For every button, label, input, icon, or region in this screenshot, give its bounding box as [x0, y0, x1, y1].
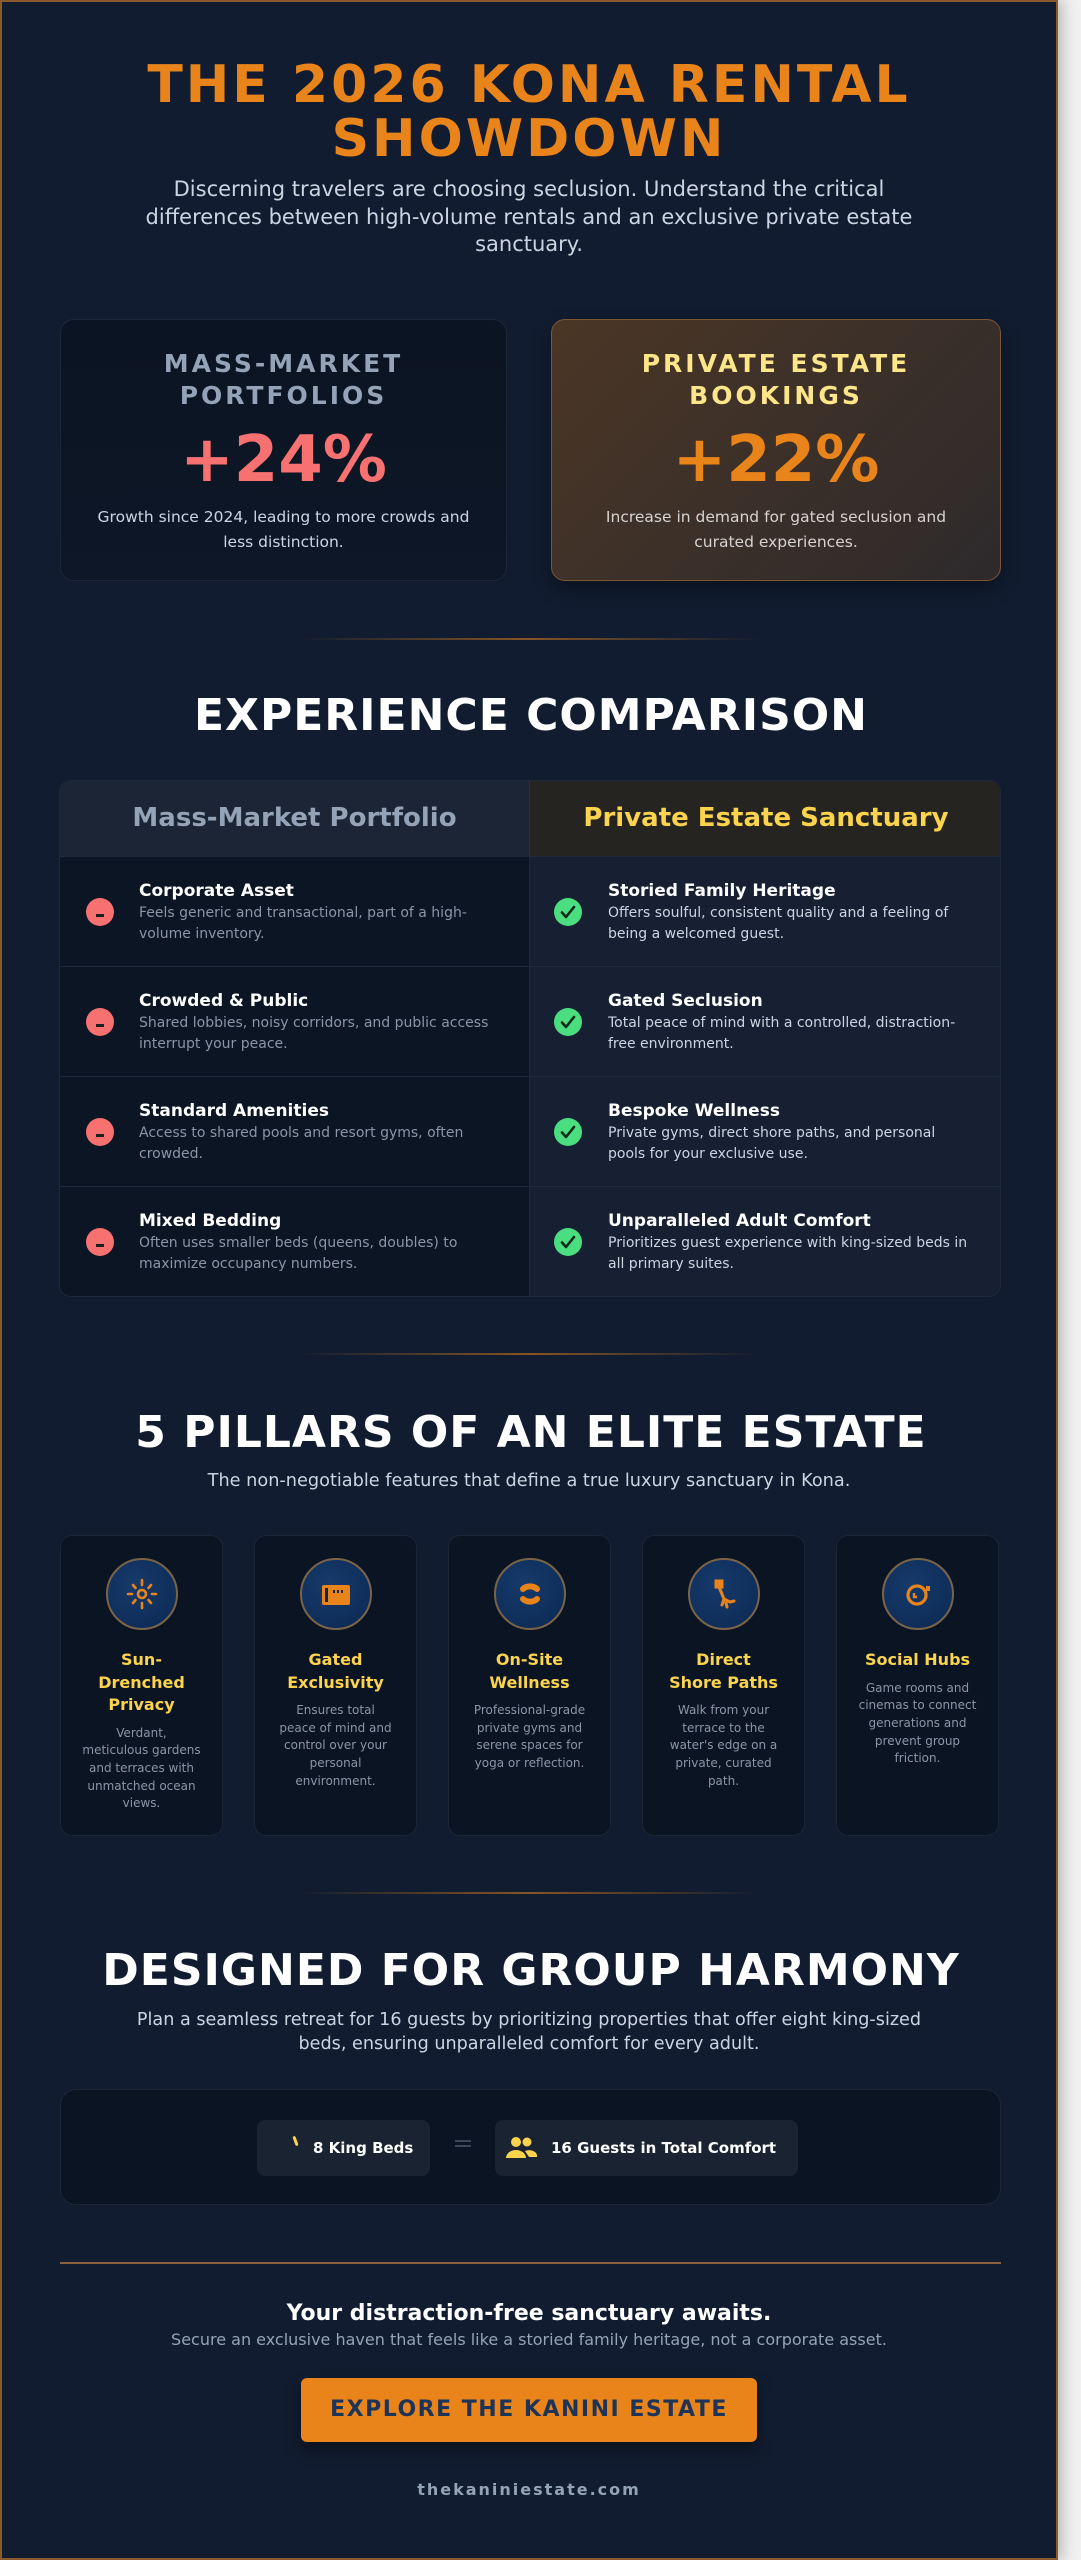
row 4 right	[529, 1186, 1002, 1296]
icon: path	[688, 1558, 760, 1630]
group harmony subtitle: beds, ensuring unparalleled comfort for every adult.	[298, 2034, 760, 2054]
pillar: on-site wellness: Professional-grade	[474, 1703, 585, 1717]
pill: guests: 16 Guests in Total Comfort	[551, 2139, 776, 2157]
pillar: direct shore paths: water's edge on a	[670, 1738, 777, 1752]
row 2 left: interrupt your peace.	[139, 1036, 288, 1052]
icon: check	[554, 898, 582, 926]
stat card: mass-market	[60, 319, 507, 581]
group harmony subtitle	[137, 2010, 921, 2054]
row 3 left: Standard Amenities	[139, 1101, 329, 1121]
subtitle: sanctuary.	[475, 232, 583, 256]
stat description: Increase in demand for gated seclusion and	[606, 508, 946, 526]
pillar: gated exclusivity: Exclusivity	[287, 1672, 384, 1692]
row 1 left: Corporate Asset	[139, 881, 294, 901]
pillar: gated exclusivity: Gated	[309, 1650, 362, 1669]
row 2 right	[529, 966, 1002, 1076]
icon: minus	[86, 1118, 114, 1146]
header: private estate	[529, 781, 1002, 856]
pillar: on-site wellness: serene spaces for	[476, 1738, 583, 1752]
stat value: +22%	[673, 423, 879, 497]
stat description	[98, 508, 469, 551]
row 4 left	[60, 1186, 529, 1296]
row 4 right: all primary suites.	[608, 1256, 734, 1272]
stat label: PORTFOLIOS	[180, 381, 387, 410]
stat card: private estate	[551, 319, 1001, 581]
stat label	[642, 349, 910, 410]
stat label: BOOKINGS	[689, 381, 863, 410]
heading: 5 pillars: 5 PILLARS OF AN ELITE ESTATE	[135, 1407, 927, 1458]
icon: check	[554, 1118, 582, 1146]
cta button	[301, 2378, 757, 2442]
stat value: +24%	[180, 423, 387, 497]
icon: check	[554, 1008, 582, 1036]
pillar: social hubs: Game rooms and	[866, 1680, 969, 1694]
stat description	[606, 508, 946, 551]
title	[147, 55, 911, 169]
icon: bed	[292, 2136, 299, 2146]
pillar: on-site wellness	[448, 1535, 611, 1836]
row 4 left: Mixed Bedding	[139, 1211, 281, 1231]
footer url: thekaniniestate.com	[417, 2480, 641, 2499]
row 1 left: Feels generic and transactional, part of a high-	[139, 905, 467, 921]
pillar: social hubs: friction.	[895, 1751, 940, 1765]
row 1 right	[529, 856, 1002, 966]
divider line	[60, 2262, 1001, 2264]
row 3 right: Bespoke Wellness	[608, 1101, 780, 1121]
stat label	[164, 349, 403, 410]
row 1 right: Storied Family Heritage	[608, 881, 836, 901]
heading: group harmony: DESIGNED FOR GROUP HARMONY	[102, 1945, 960, 1996]
heading: experience comparison: EXPERIENCE COMPARISON	[194, 690, 868, 741]
pillar: gated exclusivity: personal	[310, 1756, 361, 1770]
row 2 left: Crowded & Public	[139, 991, 308, 1011]
stat description: less distinction.	[223, 533, 344, 551]
pill: king beds	[257, 2120, 430, 2176]
row 2 right: Gated Seclusion	[608, 991, 763, 1011]
subtitle: Discerning travelers are choosing seclusion. Understand the critical	[174, 177, 884, 201]
pillar: sun-drenched privacy: Verdant,	[116, 1726, 167, 1740]
pillar: social hubs	[836, 1535, 999, 1836]
row 3 right	[529, 1076, 1002, 1186]
pillar: on-site wellness: private gyms and	[477, 1721, 582, 1735]
icon: social	[882, 1558, 954, 1630]
icon: people	[506, 2137, 537, 2158]
icon: minus	[86, 1008, 114, 1036]
stat description: curated experiences.	[694, 533, 858, 551]
stat label: PRIVATE ESTATE	[642, 349, 910, 378]
icon: sun	[106, 1558, 178, 1630]
pillar: direct shore paths: Shore Paths	[669, 1672, 778, 1692]
pillar: sun-drenched privacy: meticulous gardens	[82, 1743, 201, 1757]
pillar: gated exclusivity: environment.	[295, 1774, 376, 1788]
pillar: direct shore paths: path.	[708, 1774, 739, 1788]
cta heading: Your distraction-free sanctuary awaits.	[287, 2301, 771, 2326]
pillar: social hubs: generations and	[869, 1716, 966, 1730]
title: THE 2026 KONA RENTAL	[147, 55, 911, 115]
row 2 right: free environment.	[608, 1036, 734, 1052]
cta button: EXPLORE THE KANINI ESTATE	[330, 2397, 728, 2422]
icon: check	[554, 1228, 582, 1256]
pillar: direct shore paths: private, curated	[675, 1756, 772, 1770]
pillar: direct shore paths: Walk from your	[678, 1703, 769, 1717]
comparison table	[59, 780, 1001, 1297]
icon: wellness arcs	[494, 1558, 566, 1630]
group harmony subtitle: Plan a seamless retreat for 16 guests by prioritizing properties that offer eight king-sized	[137, 2010, 921, 2030]
row 2 left	[60, 966, 529, 1076]
row 1 left	[60, 856, 529, 966]
title: SHOWDOWN	[332, 109, 726, 169]
row 2 right: Total peace of mind with a controlled, distraction-	[608, 1015, 955, 1031]
pillar: sun-drenched privacy: and terraces with	[89, 1761, 194, 1775]
pillar: on-site wellness: On-Site	[496, 1650, 563, 1669]
pillar: direct shore paths: terrace to the	[682, 1721, 765, 1735]
row 2 left: Shared lobbies, noisy corridors, and public access	[139, 1015, 488, 1031]
pillar: direct shore paths	[642, 1535, 805, 1836]
pillar: social hubs: cinemas to connect	[859, 1698, 976, 1712]
row 1 right: being a welcomed guest.	[608, 926, 784, 942]
icon: keycard	[300, 1558, 372, 1630]
row 3 left: Access to shared pools and resort gyms, often	[139, 1125, 463, 1141]
pillar: sun-drenched privacy	[60, 1535, 223, 1836]
pill: king beds: 8 King Beds	[313, 2139, 413, 2157]
cta subtext: Secure an exclusive haven that feels like a storied family heritage, not a corporate asset.	[171, 2330, 887, 2349]
pillar: social hubs: Social Hubs	[865, 1650, 970, 1669]
icon: minus	[86, 1228, 114, 1256]
pillar: sun-drenched privacy: Privacy	[108, 1695, 175, 1714]
pillar: social hubs: prevent group	[875, 1734, 960, 1748]
subtitle	[146, 177, 912, 256]
header: mass-market: Mass-Market Portfolio	[132, 803, 457, 833]
header: mass-market	[60, 781, 529, 856]
pillar: gated exclusivity: peace of mind and	[279, 1721, 392, 1735]
row 3 left: crowded.	[139, 1146, 203, 1162]
pillar: sun-drenched privacy: Sun-	[121, 1650, 162, 1669]
row 3 left	[60, 1076, 529, 1186]
row 4 left: maximize occupancy numbers.	[139, 1256, 357, 1272]
pillar: sun-drenched privacy: Drenched	[98, 1672, 185, 1692]
pillar: direct shore paths: Direct	[696, 1650, 751, 1669]
row 3 right: Private gyms, direct shore paths, and personal	[608, 1125, 935, 1141]
pill: guests	[495, 2120, 798, 2176]
row 4 right: Prioritizes guest experience with king-sized beds in	[608, 1235, 967, 1251]
row 3 right: pools for your exclusive use.	[608, 1146, 808, 1162]
pillars subtitle: The non-negotiable features that define a true luxury sanctuary in Kona.	[208, 1471, 850, 1491]
row 1 right: Offers soulful, consistent quality and a feeling of	[608, 905, 948, 921]
pillar: sun-drenched privacy: unmatched ocean	[87, 1779, 196, 1793]
pillar: on-site wellness: Wellness	[489, 1672, 570, 1692]
icon: minus	[86, 898, 114, 926]
pillar: sun-drenched privacy: views.	[123, 1796, 160, 1810]
row 4 right: Unparalleled Adult Comfort	[608, 1211, 871, 1231]
pillar: gated exclusivity	[254, 1535, 417, 1836]
stat description: Growth since 2024, leading to more crowds and	[98, 508, 469, 526]
row 1 left: volume inventory.	[139, 926, 264, 942]
subtitle: differences between high-volume rentals and an exclusive private estate	[146, 204, 912, 228]
equals sign	[455, 2140, 471, 2147]
pillar: gated exclusivity: Ensures total	[296, 1703, 375, 1717]
pillar: gated exclusivity: control over your	[284, 1738, 387, 1752]
stat label: MASS-MARKET	[164, 349, 403, 378]
row 4 left: Often uses smaller beds (queens, doubles) to	[139, 1235, 457, 1251]
header: private estate: Private Estate Sanctuary	[583, 803, 949, 833]
pillar: on-site wellness: yoga or reflection.	[475, 1756, 584, 1770]
capacity box	[60, 2089, 1001, 2205]
